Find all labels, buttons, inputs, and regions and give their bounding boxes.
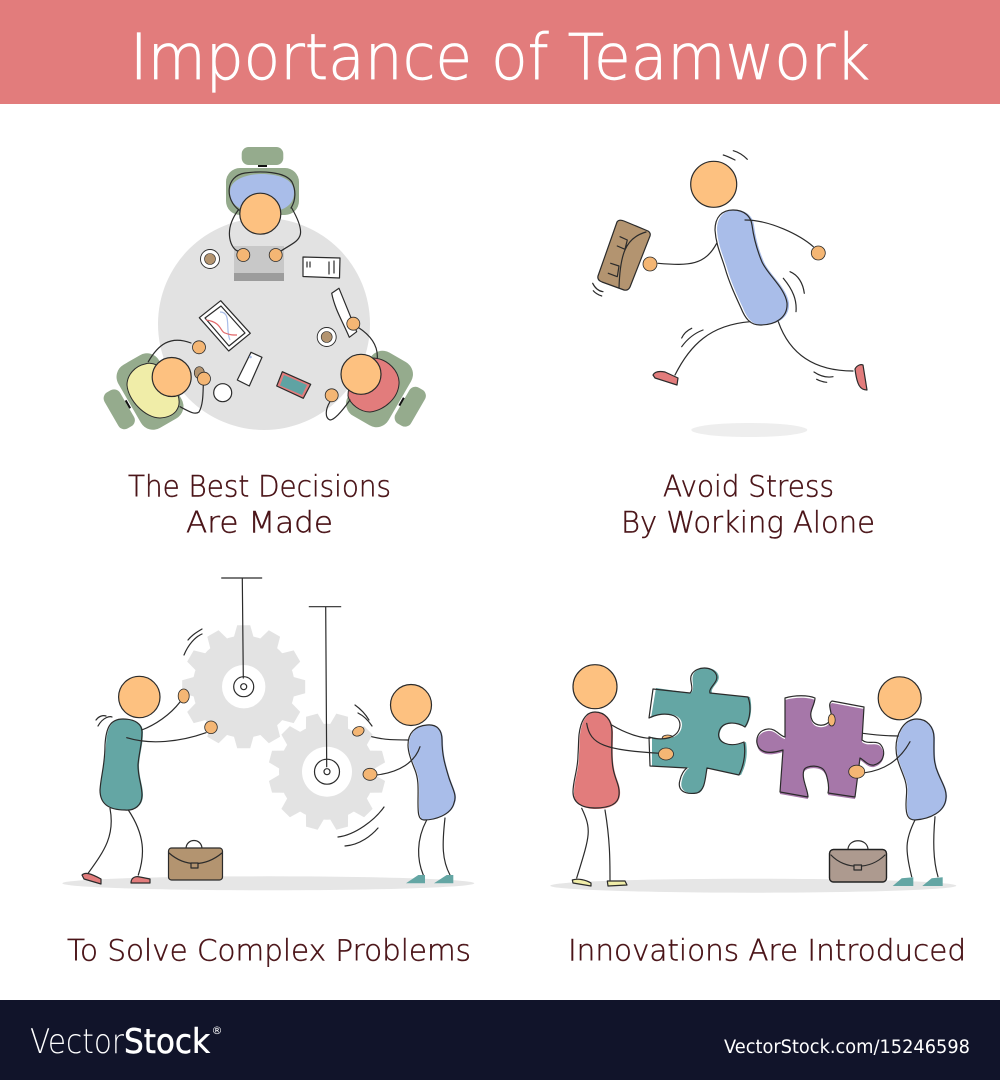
hand behind purple puzzle — [828, 714, 835, 726]
right person — [351, 684, 456, 883]
hanging rods — [222, 578, 341, 767]
coffee cup left — [200, 250, 220, 268]
cup in hand — [194, 367, 204, 379]
ground — [62, 876, 474, 890]
teal puzzle piece — [649, 668, 751, 793]
paper strip — [332, 288, 357, 337]
briefcase — [830, 841, 886, 882]
left person — [82, 676, 217, 884]
torso — [715, 210, 789, 325]
legs — [577, 808, 610, 880]
torso — [127, 363, 179, 418]
arms — [372, 737, 420, 775]
chair — [93, 348, 189, 445]
shoes — [572, 879, 627, 886]
torso — [573, 712, 620, 809]
laptop — [234, 246, 284, 281]
phone — [237, 352, 262, 386]
shoes — [653, 365, 867, 390]
caption: the best decisions: Are Made — [186, 506, 333, 540]
head — [240, 193, 281, 234]
right person — [849, 677, 947, 886]
hands — [351, 725, 377, 780]
arms — [148, 340, 203, 413]
caption: avoid stress — [621, 470, 875, 540]
coffee cup right — [317, 328, 336, 346]
hands — [192, 341, 210, 385]
legs — [907, 817, 938, 877]
head — [573, 665, 617, 709]
tablet — [277, 372, 311, 398]
torso — [408, 725, 456, 820]
caption: avoid stress: By Working Alone — [621, 506, 875, 540]
person: bottom-left, yellow — [93, 340, 210, 445]
torso — [100, 719, 143, 810]
purple puzzle piece — [757, 696, 884, 799]
caption: avoid stress: Avoid Stress — [663, 470, 834, 504]
arms — [326, 327, 377, 420]
chair — [341, 346, 436, 443]
chart paper — [199, 301, 250, 351]
head — [341, 354, 381, 394]
title: Importance of Teamwork — [130, 21, 870, 94]
footer logo — [30, 1022, 222, 1062]
head — [691, 161, 737, 207]
shoes — [82, 873, 150, 884]
legs — [675, 322, 853, 375]
hands — [237, 248, 282, 262]
caption: to solve complex problems: To Solve Complex Problems — [67, 934, 471, 968]
left person — [572, 665, 627, 886]
footer logo: Stock — [124, 1022, 210, 1062]
shoes — [893, 877, 943, 886]
left arms — [587, 723, 660, 753]
shadow — [691, 423, 807, 437]
title banner — [0, 0, 1000, 104]
gear small — [255, 700, 399, 843]
legs — [419, 818, 450, 875]
footer logo: ® — [212, 1024, 222, 1037]
arms — [127, 702, 206, 742]
footer logo: Vector — [30, 1022, 124, 1062]
head — [878, 677, 921, 720]
head — [390, 684, 432, 726]
torso — [348, 358, 399, 412]
panel: running man illustration — [593, 151, 867, 437]
briefcase — [168, 840, 222, 880]
footer url: VectorStock.com/15246598 — [724, 1037, 970, 1058]
person: bottom-right, red — [325, 317, 436, 443]
briefcase — [598, 220, 650, 290]
panel: round table meeting illustration — [93, 147, 436, 445]
torso — [230, 174, 294, 212]
caption: innovations are introduced: Innovations Are Introduced — [568, 934, 966, 968]
caption: the best decisions — [128, 470, 391, 540]
torso — [896, 719, 947, 820]
motion lines — [96, 629, 384, 846]
panel: gears illustration — [62, 578, 474, 890]
head — [152, 358, 191, 396]
person: top, blue — [226, 147, 301, 262]
hand on teal puzzle — [658, 748, 674, 760]
chair — [226, 147, 299, 215]
legs — [88, 808, 142, 875]
hand behind teal puzzle — [662, 735, 673, 741]
document — [303, 257, 340, 278]
hands — [325, 317, 360, 402]
gear large — [182, 625, 305, 748]
white cup — [214, 384, 232, 402]
ground — [550, 879, 956, 893]
panel: puzzle illustration — [550, 665, 956, 893]
shoes — [406, 875, 453, 883]
caption: the best decisions: The Best Decisions — [128, 470, 391, 504]
hands — [178, 689, 217, 734]
table — [158, 218, 370, 430]
arms — [229, 208, 301, 251]
arms — [863, 733, 910, 773]
motion lines — [593, 151, 833, 382]
head — [119, 676, 160, 718]
footer bar — [0, 1000, 1000, 1080]
arms — [658, 220, 813, 264]
hand — [849, 765, 865, 778]
hands — [643, 246, 825, 271]
